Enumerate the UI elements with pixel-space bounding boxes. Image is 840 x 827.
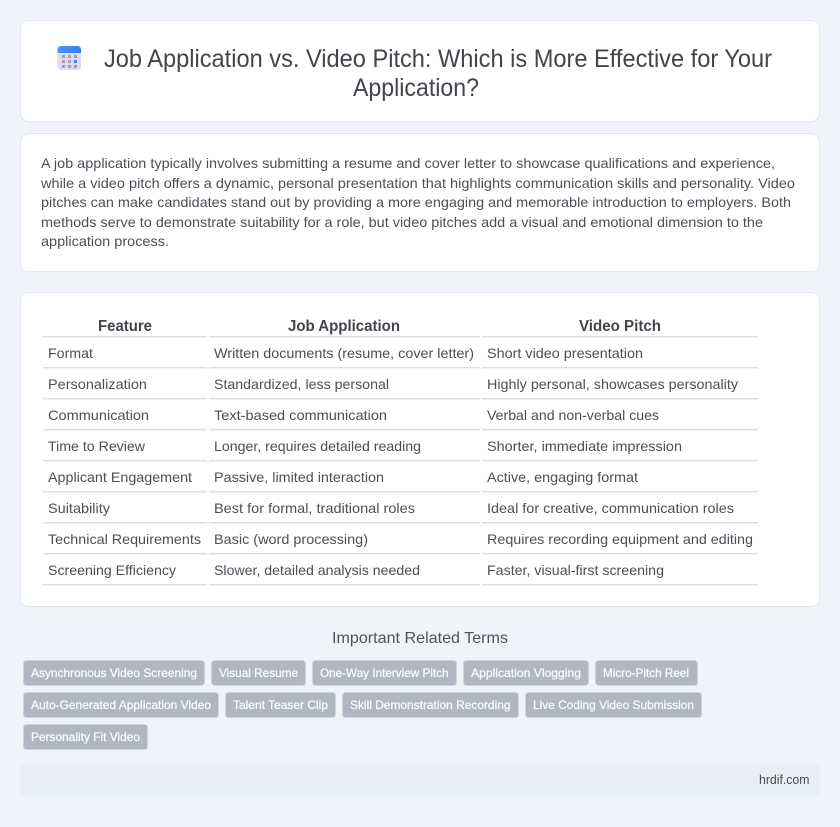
tag: asynchronous video screening: Asynchronous Video Screening <box>31 666 197 680</box>
tag: personality fit video: Personality Fit Video <box>31 730 140 744</box>
row: technical requirements: Technical Requirements <box>48 531 201 547</box>
tag: application vlogging <box>464 660 588 686</box>
tag: one-way interview pitch <box>312 660 456 686</box>
table header: Video Pitch <box>579 318 661 335</box>
row: communication: Text-based communication <box>214 407 387 423</box>
row: format <box>48 345 643 361</box>
tag: application vlogging: Application Vlogging <box>471 666 581 680</box>
title: Job Application vs. Video Pitch: Which is More Effective for Your <box>104 45 772 73</box>
row: time to review <box>48 438 682 454</box>
tag: micro-pitch reel: Micro-Pitch Reel <box>603 666 689 680</box>
row: suitability: Best for formal, traditional roles <box>214 500 415 516</box>
tag: asynchronous video screening <box>24 660 204 686</box>
row: applicant engagement <box>48 469 638 485</box>
tag: one-way interview pitch: One-Way Interview Pitch <box>320 666 448 680</box>
row: technical requirements: Basic (word processing) <box>214 531 368 547</box>
text block: summary: application process. <box>41 233 169 249</box>
tag: personality fit video <box>24 724 148 750</box>
footer: hrdif.com <box>759 772 810 787</box>
row: applicant engagement: Active, engaging format <box>487 469 638 485</box>
icon: calendar <box>58 46 81 70</box>
row: communication: Verbal and non-verbal cues <box>487 407 659 423</box>
row: format: Written documents (resume, cover letter) <box>214 345 474 361</box>
tag: skill demonstration recording <box>342 692 518 718</box>
table header <box>98 318 661 335</box>
row: technical requirements <box>48 531 753 547</box>
footer <box>20 763 820 797</box>
row: format: Format <box>48 345 93 361</box>
tag: micro-pitch reel <box>596 660 698 686</box>
row: screening efficiency <box>48 562 664 578</box>
row: personalization: Standardized, less personal <box>214 376 389 392</box>
title: Application? <box>353 74 479 102</box>
tag: talent teaser clip <box>226 692 336 718</box>
row: screening efficiency: Slower, detailed analysis needed <box>214 562 420 578</box>
row: suitability: Suitability <box>48 500 110 516</box>
row: screening efficiency: Faster, visual-first screening <box>487 562 664 578</box>
text block: summary: A job application typically involves submitting a resume and cover letter to showcase qualifications and experience, <box>41 155 775 171</box>
row: time to review: Time to Review <box>48 438 146 454</box>
row: suitability: Ideal for creative, communication roles <box>487 500 734 516</box>
panel: comparison table <box>20 292 820 606</box>
title <box>104 45 772 102</box>
text block: summary: while a video pitch offers a dynamic, personal presentation that highlights communication skills and personality. Video <box>40 175 795 191</box>
table header: Job Application <box>288 318 400 335</box>
tag: visual resume <box>212 660 306 686</box>
row: time to review: Longer, requires detailed reading <box>214 438 421 454</box>
heading: related terms: Important Related Terms <box>332 630 508 647</box>
table header: Feature <box>98 318 152 335</box>
row: communication <box>48 407 659 423</box>
text block: summary: methods serve to demonstrate suitability for a role, but video pitches add a visual and emotional dimension to the <box>41 214 763 230</box>
text block: summary: pitches can make candidates stand out by providing a more engaging and memorable introduction to employers. Both <box>41 194 791 210</box>
row: format: Short video presentation <box>487 345 643 361</box>
tag: live coding video submission: Live Coding Video Submission <box>533 698 694 712</box>
tag: skill demonstration recording: Skill Demonstration Recording <box>350 698 510 712</box>
row: personalization: Personalization <box>48 376 147 392</box>
panel: related term tags <box>24 660 702 750</box>
tag: live coding video submission <box>526 692 702 718</box>
row: screening efficiency: Screening Efficiency <box>48 562 176 578</box>
row: personalization <box>48 376 738 392</box>
tag: talent teaser clip: Talent Teaser Clip <box>233 698 328 712</box>
row: suitability <box>48 500 734 516</box>
text block: summary <box>40 155 795 249</box>
row: personalization: Highly personal, showcases personality <box>487 376 738 392</box>
panel: intro paragraph <box>20 134 820 272</box>
tag: auto-generated application video: Auto-Generated Application Video <box>31 698 211 712</box>
row: time to review: Shorter, immediate impression <box>487 438 682 454</box>
row: communication: Communication <box>48 407 149 423</box>
tag: auto-generated application video <box>24 692 218 718</box>
row: applicant engagement: Passive, limited interaction <box>214 469 384 485</box>
row: applicant engagement: Applicant Engagement <box>48 469 192 485</box>
tag: visual resume: Visual Resume <box>219 666 298 680</box>
panel: title card <box>20 20 820 122</box>
row: technical requirements: Requires recording equipment and editing <box>487 531 753 547</box>
